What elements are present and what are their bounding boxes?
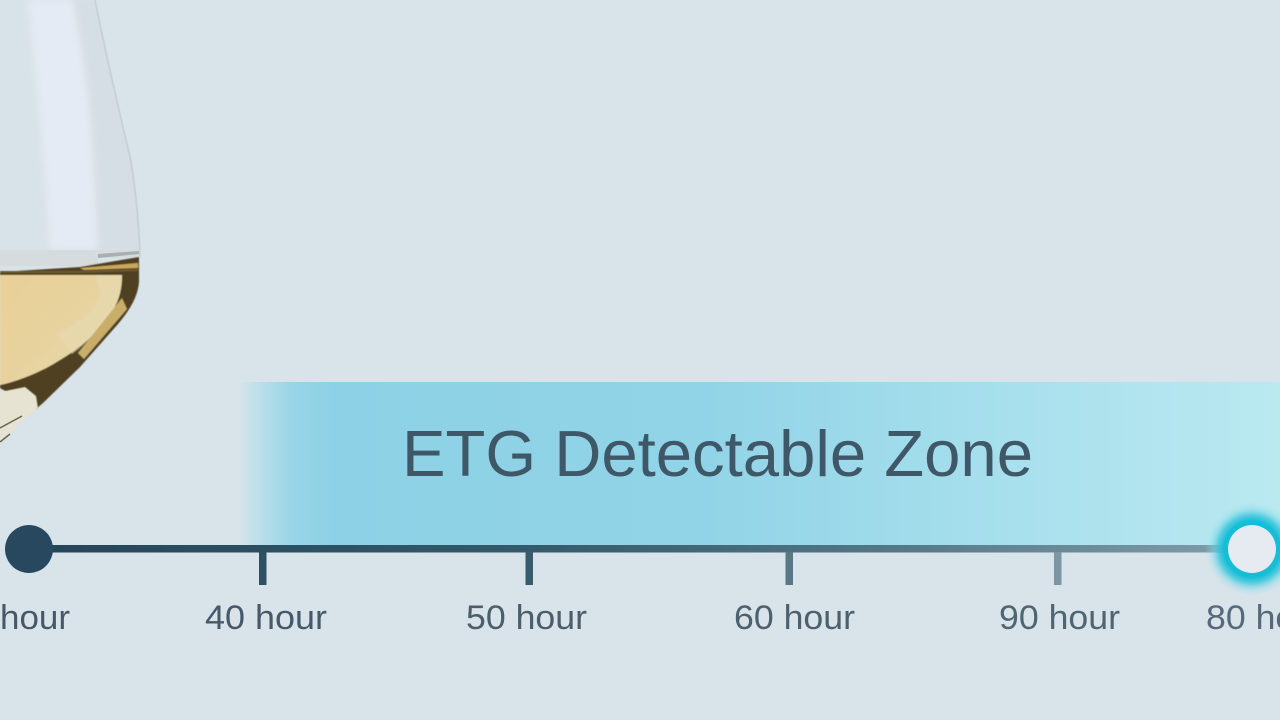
tick: 60 hour [786, 552, 793, 585]
outer glass and shadow [0, 257, 139, 409]
timeline axis [45, 545, 1235, 552]
label: 50 hour: 50 hour [466, 599, 587, 637]
timeline [0, 502, 1280, 637]
glass right edge tint [72, 0, 140, 250]
base reflection streaks [0, 416, 22, 442]
label: 90 hour: 90 hour [999, 599, 1120, 637]
wine body [0, 275, 122, 385]
label: 60 hour: 60 hour [734, 599, 855, 637]
glass edge line [95, 0, 140, 257]
zone label: ETG Detectable Zone [402, 417, 1033, 490]
tick: 50 hour [526, 552, 533, 585]
dark wine shell [0, 257, 139, 409]
glass base reflection [0, 387, 38, 445]
wine facet [56, 275, 122, 354]
glass bowl [0, 0, 140, 452]
label: 40 hour: 40 hour [205, 599, 327, 637]
tick: 90 hour [1054, 552, 1062, 585]
gold refraction strip [78, 298, 127, 359]
label: start hour: hour [0, 599, 70, 637]
glass highlight [28, 0, 97, 250]
wine glass [0, 0, 140, 452]
detectable zone band [240, 382, 1280, 546]
end marker glow [1205, 502, 1280, 596]
rim line [0, 270, 138, 272]
zone fill [240, 382, 1280, 546]
grey meniscus streak [98, 251, 139, 258]
band above the wine [0, 250, 139, 266]
start marker [5, 525, 53, 573]
end marker [1228, 525, 1276, 573]
tick: 40 hour [259, 552, 266, 585]
upper gold rim [80, 263, 138, 270]
